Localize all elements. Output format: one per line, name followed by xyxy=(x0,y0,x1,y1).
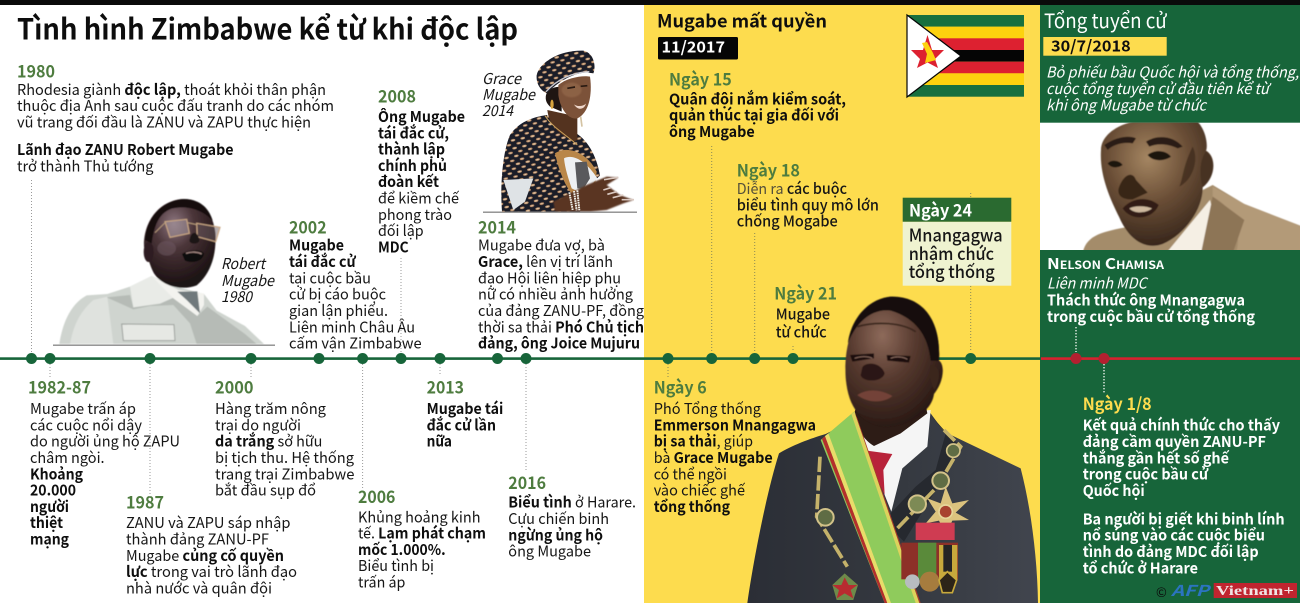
event 2013: 2013 xyxy=(427,373,464,398)
event 1982-87: Mugabe trấn áp xyxy=(30,398,136,419)
event 1980: thuộc địa Anh sau cuộc đấu tranh do các nhóm xyxy=(17,95,334,116)
event card: Ngày 24: tổng thống xyxy=(909,259,995,284)
credits: AFP and Vietnam+: Vietnam+ xyxy=(1216,583,1294,598)
event 1982-87: 1982-87 xyxy=(28,373,91,398)
top rule xyxy=(0,0,1300,5)
event 2002: Mugabe xyxy=(289,235,344,256)
event 2000: bị tịch thu. Hệ thống xyxy=(215,447,355,468)
event 1982-87: châm ngòi. xyxy=(30,447,105,468)
event 2008: 2008 xyxy=(378,83,416,108)
event 2014: nữ có nhiều ảnh hưởng xyxy=(478,284,634,305)
event 2014: thời sa thải Phó Chủ tịch xyxy=(478,316,644,337)
event 1987: nhà nước và quân đội xyxy=(126,578,272,598)
event 2013: đắc cử lần xyxy=(427,414,496,435)
event: Ngày 6: Ngày 6 xyxy=(654,373,707,398)
event: Ngày 21: từ chức xyxy=(776,321,827,342)
event: Ngày 6: bà Grace Mugabe xyxy=(654,447,773,468)
photo base line xyxy=(53,344,275,346)
event 2008: để kiềm chế xyxy=(378,188,460,208)
event 2002: cấm vận Zimbabwe xyxy=(289,333,422,354)
event: Ngày 1/8: tình do đảng MDC đối lập xyxy=(1083,541,1259,562)
event 2014 xyxy=(478,214,645,354)
event 1980 xyxy=(17,58,334,176)
caption: Grace Mugabe 2014: 2014 xyxy=(482,100,515,121)
event 2006: trấn áp xyxy=(358,571,405,592)
event: Ngày 6: Phó Tổng thống xyxy=(654,398,762,419)
event 2016: Biểu tình ở Harare. xyxy=(508,492,636,513)
event 1987: lực trong vai trò lãnh đạo xyxy=(126,561,297,582)
date tag: 11/2017 xyxy=(658,35,738,60)
event 2016: ngừng ủng hộ xyxy=(508,524,603,545)
event 2014: đạo Hội liên hiệp phụ xyxy=(478,267,621,288)
event: Ngày 1/8: Kết quả chính thức cho thấy xyxy=(1083,415,1280,436)
event: Ngày 1/8: tổ chức ở Harare xyxy=(1083,557,1198,578)
event 1982-87: do người ủng hộ ZAPU xyxy=(30,431,180,452)
election description: cuộc tổng tuyển cử đầu tiên kể từ xyxy=(1046,78,1271,99)
event 2002: Liên minh Châu Âu xyxy=(289,316,415,337)
event: Ngày 1/8: nổ súng vào các cuộc biểu xyxy=(1083,525,1265,546)
event 2002: 2002 xyxy=(289,214,327,239)
event 2000: da trắng sở hữu xyxy=(215,431,322,452)
caption: Robert Mugabe 1980: Mugabe xyxy=(221,270,276,291)
event 1982-87: 20.000 xyxy=(30,480,76,501)
event 1982-87: Khoảng xyxy=(30,463,83,484)
event: Ngày 18: chống Mogabe xyxy=(737,211,838,232)
label: Nelson Chamisa: trong cuộc bầu cử tổng thống xyxy=(1047,306,1255,327)
event 1980: Lãnh đạo ZANU Robert Mugabe xyxy=(17,139,234,160)
event 2006 xyxy=(358,483,486,592)
event 1980: trở thành Thủ tướng xyxy=(17,155,154,176)
photo base line xyxy=(483,212,637,213)
event 2000: bắt đầu sụp đổ xyxy=(215,480,316,501)
event: Ngày 6: tổng thống xyxy=(654,496,730,517)
event: Ngày 1/8: đảng cầm quyền ZANU-PF xyxy=(1083,431,1266,452)
event 2014: Grace, lên vị trí lãnh xyxy=(478,251,613,272)
event 1982-87: mạng xyxy=(30,528,69,550)
event: Ngày 6 xyxy=(654,373,816,517)
photo: Robert Mugabe 1980 xyxy=(59,199,264,344)
event: Ngày 1/8: thắng gần hết số ghế xyxy=(1083,447,1230,468)
event: Ngày 6: có thể ngồi xyxy=(654,464,727,484)
event: Ngày 1/8: Ngày 1/8 xyxy=(1083,390,1152,415)
event 2000: trang trại Zimbabwe xyxy=(215,463,354,484)
event 2006: Biểu tình bị xyxy=(358,555,434,576)
event card: Ngày 24: Mnangagwa xyxy=(909,223,1003,248)
label: Nelson Chamisa: Nelson Chamisa xyxy=(1047,253,1165,274)
photo: Nelson Chamisa xyxy=(1040,120,1300,253)
event 2000 xyxy=(215,373,355,501)
event 2016: 2016 xyxy=(508,469,546,494)
election description: khi ông Mugabe từ chức xyxy=(1046,94,1207,115)
event 2002 xyxy=(289,214,422,354)
event 1982-87 xyxy=(28,373,180,550)
event card: Ngày 24: nhậm chức xyxy=(909,241,994,266)
event: Ngày 18: Diễn ra các buộc xyxy=(737,178,847,199)
event: Ngày 15: quản thúc tại gia đối với xyxy=(669,105,839,126)
event 2000: trại do người xyxy=(215,414,301,435)
event: Ngày 15: Quân đội nắm kiểm soát, xyxy=(669,88,846,109)
event 1982-87: thiệt xyxy=(30,512,64,533)
event 1982-87: người xyxy=(30,496,69,517)
event 2016: Cựu chiến binh xyxy=(508,508,609,529)
event 1980: 1980 xyxy=(17,58,55,83)
title: Tình hình Zimbabwe kể từ khi độc lập xyxy=(17,6,518,48)
event 2016 xyxy=(508,469,636,562)
event: Ngày 1/8: trong cuộc bầu cử xyxy=(1083,464,1209,485)
caption: Grace Mugabe 2014: Grace xyxy=(482,68,523,89)
event 2014: của đảng ZANU-PF, đồng xyxy=(478,300,645,321)
icon: Zimbabwe flag xyxy=(907,15,1024,97)
event 2008: chính phủ xyxy=(378,155,447,176)
label: Nelson Chamisa xyxy=(1047,253,1255,327)
event 2002: tại cuộc bầu xyxy=(289,267,371,288)
event 1987 xyxy=(126,489,297,598)
label: Nelson Chamisa: Liên minh MDC xyxy=(1047,272,1149,293)
caption: Robert Mugabe 1980: 1980 xyxy=(221,286,254,307)
timeline markers: 2018 xyxy=(1070,353,1110,364)
date tag: 30/7/2018 xyxy=(1043,34,1167,56)
credits: AFP and Vietnam+: AFP xyxy=(1170,580,1212,601)
event 2008 xyxy=(378,83,465,258)
event 2013 xyxy=(427,373,503,452)
event 2006: Khủng hoảng kinh xyxy=(358,506,480,527)
heading: Mugabe mất quyền: Mugabe mất quyền xyxy=(657,7,827,33)
event: Ngày 21: Mugabe xyxy=(776,303,830,324)
event 2008: đoàn kết xyxy=(378,171,440,192)
caption: Grace Mugabe 2014 xyxy=(482,68,537,121)
credits: AFP and Vietnam+ xyxy=(1156,580,1297,601)
event: Ngày 1/8: Quốc hội xyxy=(1083,480,1145,501)
caption: Grace Mugabe 2014: Mugabe xyxy=(482,84,537,105)
event 2002: cử bị cáo buộc xyxy=(289,284,386,305)
date tag: 11/2017: 11/2017 xyxy=(662,35,725,57)
event 2008: phong trào xyxy=(378,204,452,225)
panel: post-independence timeline xyxy=(17,6,645,598)
event: Ngày 18: biểu tình quy mô lớn xyxy=(737,194,879,215)
event 1987: thành đảng ZANU-PF xyxy=(126,528,269,550)
event: Ngày 18 xyxy=(737,156,879,232)
caption: Robert Mugabe 1980: Robert xyxy=(221,253,267,274)
event 2002: gian lận phiếu. xyxy=(289,300,388,321)
label: Nelson Chamisa: Thách thức ông Mnangagwa xyxy=(1047,290,1245,311)
event: Ngày 1/8: Ba người bị giết khi binh lính xyxy=(1083,508,1285,529)
timeline axis: 2018 xyxy=(1041,357,1300,360)
event: Ngày 15: Ngày 15 xyxy=(669,66,732,91)
event 2000: Hàng trăm nông xyxy=(215,398,327,419)
event: Ngày 15 xyxy=(669,66,846,142)
heading: Tổng tuyển cử: Tổng tuyển cử xyxy=(1044,5,1168,34)
photo: Grace Mugabe 2014 xyxy=(501,51,634,212)
event: Ngày 15: ông Mugabe xyxy=(669,121,755,142)
event 2016: ông Mugabe xyxy=(508,540,591,562)
event 2008: thành lập xyxy=(378,139,445,160)
event 2002: tái đắc cử xyxy=(289,251,357,272)
event: Ngày 6: vào chiếc ghế xyxy=(654,480,746,501)
event 2014: đảng, ông Joice Mujuru xyxy=(478,333,640,354)
event card: Ngày 24: Ngày 24 xyxy=(909,197,972,222)
date tag: 30/7/2018: 30/7/2018 xyxy=(1051,34,1131,56)
photo: Emmerson Mnangagwa xyxy=(747,297,1038,603)
panel: general election xyxy=(1040,5,1300,603)
event 2006: mốc 1.000%. xyxy=(358,539,446,560)
event 2013: Mugabe tái xyxy=(427,398,503,419)
event 2008: đối lập xyxy=(378,220,424,241)
event 1980: vũ trang đối đầu là ZANU và ZAPU thực hiện xyxy=(17,111,311,132)
event 2008: Ông Mugabe xyxy=(378,106,465,127)
event 1982-87: các cuộc nổi dậy xyxy=(30,414,142,435)
election description xyxy=(1046,62,1299,115)
event 2006: 2006 xyxy=(358,483,395,508)
event 2014: 2014 xyxy=(478,214,516,239)
event: Ngày 21 xyxy=(774,280,837,342)
event: Ngày 6: Emmerson Mnangagwa xyxy=(654,414,816,436)
caption: Robert Mugabe 1980 xyxy=(221,253,276,307)
event 2000: 2000 xyxy=(215,373,254,398)
event: Ngày 18: Ngày 18 xyxy=(737,156,800,181)
event card: Ngày 24 xyxy=(903,197,1011,286)
event 1987: Mugabe củng cố quyền xyxy=(126,545,284,566)
event 1987: 1987 xyxy=(126,489,164,514)
event 1980: Rhodesia giành độc lập, thoát khỏi thân phận xyxy=(17,79,326,100)
timeline markers xyxy=(26,353,976,364)
event 2008: MDC xyxy=(378,236,409,258)
event 2013: nữa xyxy=(427,431,452,452)
event: Ngày 6: bị sa thải, giúp xyxy=(654,431,753,452)
event 2008: tái đắc cử, xyxy=(378,122,449,143)
event: Ngày 1/8 xyxy=(1083,390,1285,578)
event 1987: ZANU và ZAPU sáp nhập xyxy=(126,512,290,533)
event 2014: Mugabe đưa vợ, bà xyxy=(478,235,605,256)
event: Ngày 21: Ngày 21 xyxy=(774,280,837,305)
credits: AFP and Vietnam+: © xyxy=(1156,582,1167,601)
event 2006: tế. Lạm phát chạm xyxy=(358,523,486,544)
timeline axis xyxy=(0,357,1041,360)
